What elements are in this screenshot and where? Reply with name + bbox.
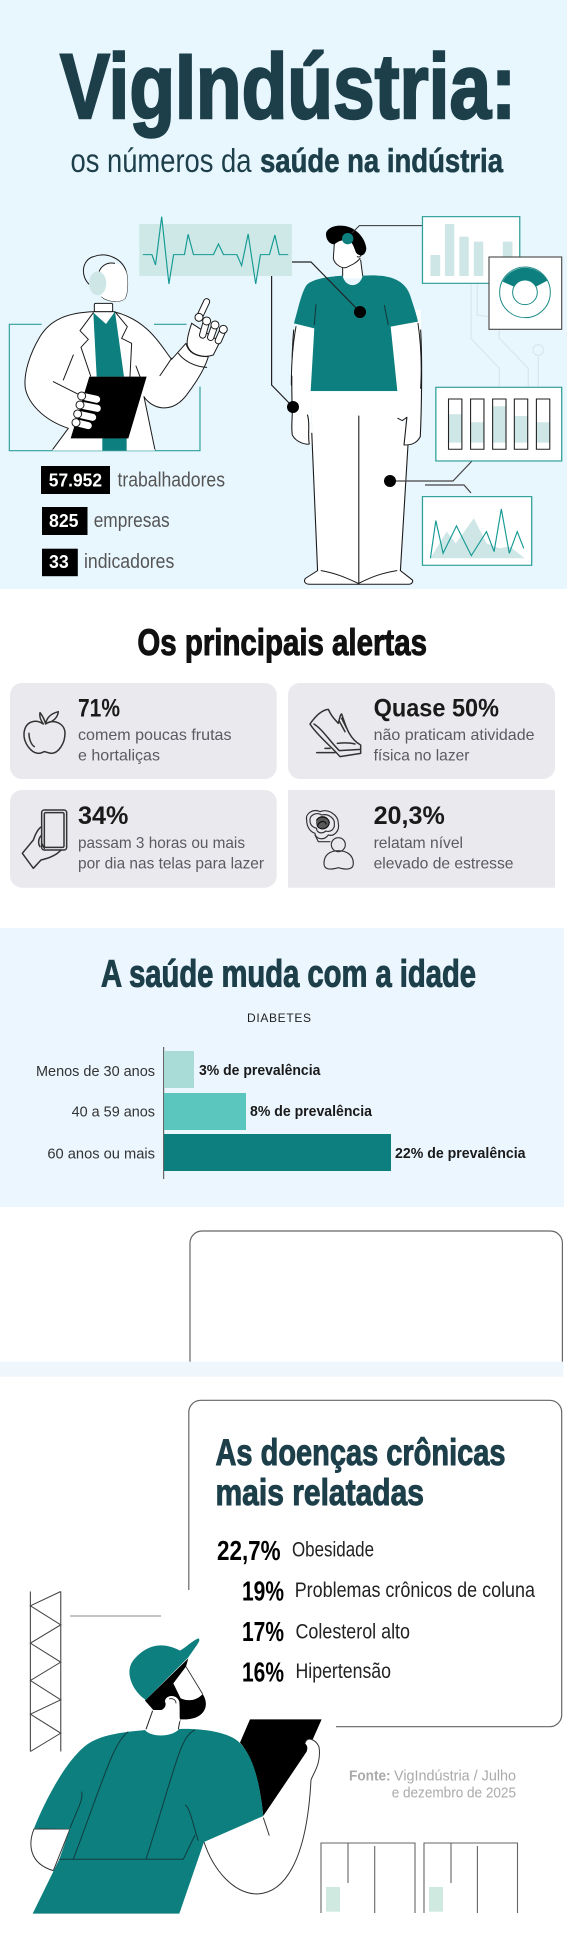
- chart title: diabetes: DIABETES: [247, 1011, 311, 1025]
- empty rounded card: [190, 1231, 562, 1362]
- card: estresse: relatam nível: [374, 835, 463, 852]
- card: telas: por dia nas telas para lazer: [78, 856, 265, 873]
- item: hipertensao: [242, 1657, 391, 1688]
- heading: doencas cronicas: [216, 1432, 506, 1513]
- item: coluna: [242, 1576, 535, 1607]
- item: colesterol: 17%: [242, 1616, 284, 1647]
- source note: VigIndústria / Julho: [394, 1769, 516, 1785]
- subtitle: saúde na indústria: [260, 142, 504, 179]
- panel: age section background: [0, 928, 564, 1207]
- card: telas: passam 3 horas ou mais: [78, 835, 245, 852]
- decorative chart frames: [321, 1843, 518, 1913]
- panel: area chart card: [422, 497, 532, 565]
- source note: Fonte:: [349, 1769, 391, 1785]
- stat: companies: 825: [49, 511, 78, 531]
- card: frutas: comem poucas frutas: [78, 727, 232, 744]
- card: frutas: [10, 683, 277, 779]
- bar: 60 anos ou mais: [47, 1134, 526, 1171]
- panel: chronic diseases: [189, 1400, 562, 1727]
- stat: indicators: indicadores: [84, 551, 174, 573]
- item: colesterol: Colesterol alto: [296, 1621, 410, 1644]
- item: coluna: 19%: [242, 1576, 284, 1607]
- card: estresse: [288, 790, 555, 888]
- bar: 60 anos ou mais: 22% de prevalência: [395, 1145, 526, 1162]
- card: estresse: 20,3%: [374, 802, 445, 830]
- stat: indicators: [42, 549, 174, 576]
- item: obesidade: Obesidade: [292, 1539, 374, 1562]
- card: atividade fisica: física no lazer: [374, 748, 470, 765]
- item: hipertensao: 16%: [242, 1657, 284, 1688]
- card: atividade fisica: Quase 50%: [374, 695, 499, 723]
- decorative circuit lines: [471, 283, 544, 387]
- decorative truss: [30, 1592, 61, 1751]
- card: frutas: e hortaliças: [78, 748, 160, 765]
- card: estresse: elevado de estresse: [374, 856, 514, 873]
- stat: workers: trabalhadores: [118, 470, 225, 492]
- stat: workers: [41, 466, 225, 494]
- stat: workers: 57.952: [49, 471, 102, 491]
- source note: e dezembro de 2025: [392, 1786, 516, 1802]
- bar chart: diabetes by age: [36, 1047, 526, 1179]
- bar: 60 anos ou mais: 60 anos ou mais: [47, 1146, 155, 1163]
- icon: apple: [24, 712, 65, 753]
- item: colesterol: [242, 1616, 410, 1647]
- bar: menos de 30 anos: [36, 1051, 321, 1088]
- stat: indicators: 33: [49, 552, 69, 572]
- stat: companies: [42, 507, 170, 535]
- item: obesidade: [217, 1535, 374, 1566]
- item: hipertensao: Hipertensão: [296, 1660, 391, 1683]
- icon: phone in hand: [22, 810, 67, 868]
- panel: hero background: [0, 0, 567, 589]
- panel: column gauges card: [436, 387, 562, 461]
- illustration: standing man: [291, 226, 422, 584]
- panel: donut chart card: [489, 257, 562, 329]
- card: telas: [10, 790, 277, 888]
- icon: stressed person: [306, 811, 353, 869]
- card: frutas: 71%: [78, 695, 120, 723]
- subtitle: os números da: [70, 142, 252, 179]
- band: [0, 1362, 564, 1377]
- bar: 40 a 59 anos: [72, 1093, 373, 1130]
- icon: running shoe: [310, 709, 361, 757]
- bar: 40 a 59 anos: 8% de prevalência: [250, 1103, 373, 1120]
- heading: principais alertas: Os principais alertas: [137, 622, 427, 663]
- source note: [349, 1769, 516, 1802]
- panel: bar chart card: [422, 217, 520, 283]
- illustration: ecg panel: [139, 217, 292, 284]
- subtitle: [70, 142, 504, 179]
- item: obesidade: 22,7%: [217, 1535, 281, 1566]
- decorative line: [70, 1616, 161, 1617]
- stat: companies: empresas: [94, 510, 170, 532]
- card: atividade fisica: não praticam atividade: [374, 727, 535, 744]
- illustration: worker: [31, 1638, 322, 1914]
- card: atividade fisica: [288, 683, 555, 779]
- bar: menos de 30 anos: 3% de prevalência: [199, 1062, 321, 1079]
- card: telas: 34%: [78, 802, 128, 830]
- bar: 40 a 59 anos: 40 a 59 anos: [72, 1104, 155, 1121]
- heading: doencas cronicas: mais relatadas: [216, 1472, 424, 1513]
- illustration: doctor: [9, 255, 227, 451]
- connector lines and dots: [272, 262, 472, 493]
- bar: menos de 30 anos: Menos de 30 anos: [36, 1063, 155, 1080]
